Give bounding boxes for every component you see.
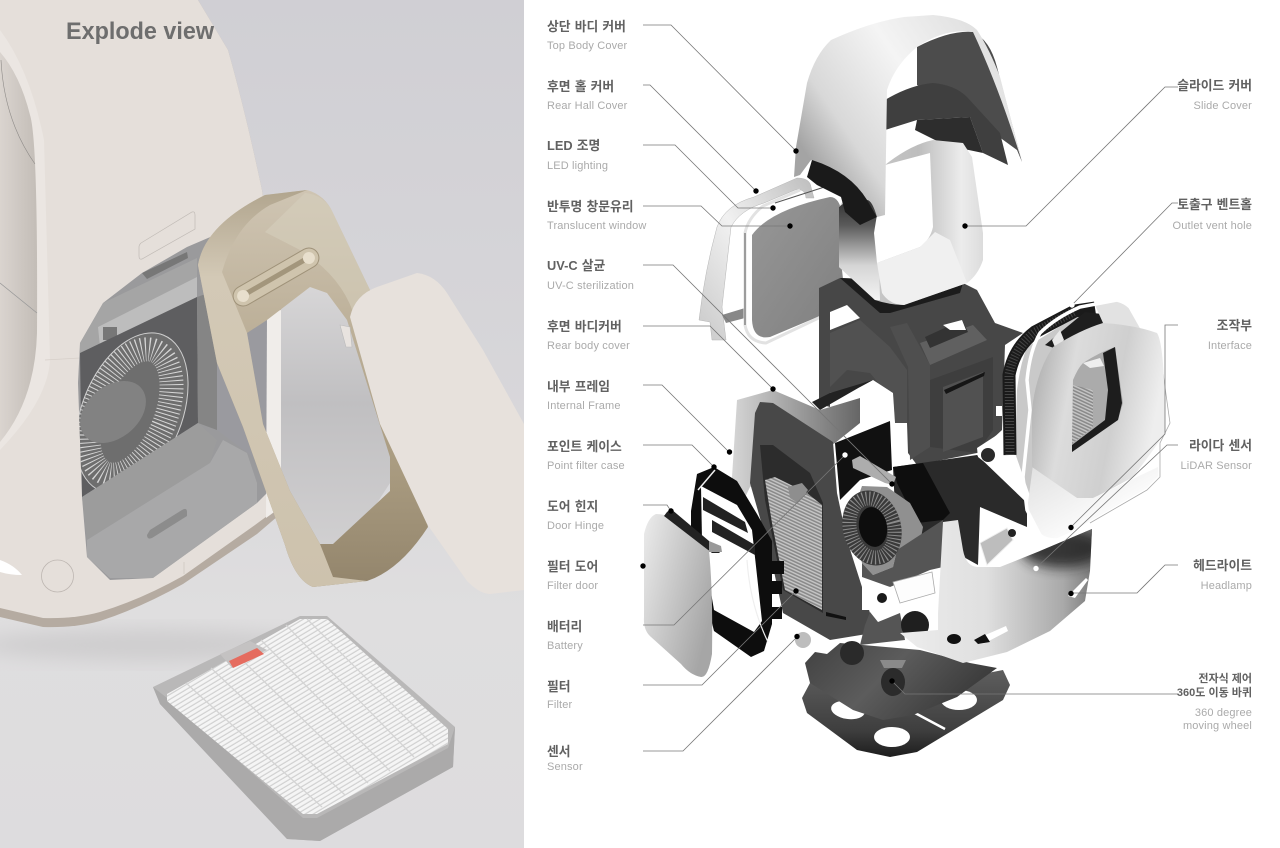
rear hall cover [699, 178, 814, 340]
label: headlamp: 헤드라이트 [1193, 558, 1252, 573]
fan [79, 332, 189, 488]
shell opening [1072, 347, 1123, 452]
main body [0, 0, 285, 627]
translucent window [752, 197, 846, 337]
label: rear body cover: Rear body cover [547, 340, 630, 352]
see-through background behind door [281, 308, 390, 544]
central frame [812, 278, 1023, 465]
dark mass behind the lower assembly [893, 455, 1027, 567]
label: slide cover: Slide Cover [1193, 100, 1252, 112]
label: filter door [547, 559, 598, 592]
label: interface [1208, 318, 1252, 352]
back panel [1015, 312, 1100, 510]
label: translucent window: Translucent window [547, 220, 647, 232]
filter mesh [765, 477, 822, 610]
wheels [840, 611, 929, 696]
label: door hinge [547, 499, 604, 532]
label: LED lighting: LED 조명 [547, 138, 600, 153]
label: filter: Filter [547, 699, 573, 711]
black fan plate [835, 421, 892, 500]
left labels [547, 19, 647, 773]
black mass behind fan [893, 463, 950, 523]
filter case [691, 467, 784, 657]
vent assembly [1009, 300, 1170, 540]
label: LED lighting [547, 138, 608, 172]
label: translucent window [547, 199, 647, 232]
label: moving wheel: 360 degree [1195, 707, 1252, 719]
label: headlamp: Headlamp [1201, 580, 1252, 592]
UV block and fan housing [850, 456, 943, 610]
label: interface: Interface [1208, 340, 1252, 352]
sensor disc [795, 632, 811, 648]
leader dots [640, 148, 1075, 684]
white cutout and knob [977, 435, 1023, 492]
mechanism inside ring [1045, 312, 1118, 350]
label: LiDAR sensor: 라이다 센서 [1189, 438, 1252, 453]
label: sensor [547, 744, 583, 773]
front lower body cover [900, 520, 1104, 663]
rear dark body [750, 402, 873, 640]
label: top body cover [547, 19, 628, 52]
rear body cover [732, 390, 860, 525]
label: point filter case: 포인트 케이스 [547, 439, 622, 454]
toothed black belt [1009, 308, 1095, 455]
label: LiDAR sensor: LiDAR Sensor [1180, 460, 1252, 472]
magnet slot [232, 248, 320, 306]
upper plate [805, 643, 997, 720]
label: moving wheel: 360도 이동 바퀴 [1177, 686, 1252, 699]
label: LED lighting: LED lighting [547, 160, 608, 172]
exploded diagram [640, 15, 1178, 757]
label: sensor: Sensor [547, 761, 583, 773]
label: internal frame [547, 379, 621, 412]
base plate [802, 670, 1010, 757]
battery [980, 528, 1013, 565]
door hinge [664, 509, 720, 553]
lower shell [1027, 465, 1160, 540]
label: outlet vent hole: Outlet vent hole [1173, 220, 1252, 232]
label: top body cover: 상단 바디 커버 [547, 19, 626, 34]
label: rear body cover: 후면 바디커버 [547, 319, 622, 334]
filter [153, 616, 455, 841]
label: door hinge: Door Hinge [547, 520, 604, 532]
label: translucent window: 반투명 창문유리 [547, 199, 634, 214]
label: filter [547, 679, 573, 711]
label: interface: 조작부 [1217, 318, 1252, 333]
right labels [1173, 78, 1252, 732]
label: point filter case [547, 439, 625, 472]
thin white ring [1023, 300, 1170, 540]
label: outlet vent hole: 토출구 벤트홀 [1177, 197, 1252, 212]
top body cover [794, 15, 1022, 217]
label: internal frame: Internal Frame [547, 400, 621, 412]
label: rear hall cover: Rear Hall Cover [547, 100, 628, 112]
label: filter: 필터 [547, 679, 571, 694]
label: rear hall cover [547, 79, 628, 112]
blower fan [834, 484, 910, 572]
door panel [350, 273, 524, 594]
label: slide cover [1177, 78, 1252, 112]
leader lines [643, 25, 1178, 751]
filter bay interior [78, 237, 267, 580]
label: point filter case: Point filter case [547, 460, 625, 472]
filter pull tab [220, 641, 267, 668]
slide cover [839, 140, 983, 305]
label: moving wheel: moving wheel [1183, 720, 1252, 732]
label: battery [547, 619, 583, 652]
label: door hinge: 도어 힌지 [547, 499, 598, 514]
label: moving wheel [1177, 671, 1252, 732]
label: UV-C sterilization [547, 258, 634, 292]
label: rear body cover [547, 319, 630, 352]
door frame [198, 190, 428, 587]
label: UV-C sterilization: UV-C 살균 [547, 258, 606, 273]
label: headlamp [1193, 558, 1252, 592]
main shell [1032, 323, 1165, 498]
panel: product photo [0, 0, 524, 848]
top right ring fill [1095, 300, 1163, 373]
label: slide cover: 슬라이드 커버 [1177, 78, 1252, 93]
label: internal frame: 내부 프레임 [547, 379, 610, 394]
label: moving wheel: 전자식 제어 [1198, 671, 1252, 685]
label: filter door: 필터 도어 [547, 559, 598, 574]
label: battery: Battery [547, 640, 583, 652]
label: top body cover: Top Body Cover [547, 40, 628, 52]
white body edge seen through door [266, 310, 281, 518]
label: outlet vent hole [1173, 197, 1252, 232]
label: rear hall cover: 후면 홀 커버 [547, 79, 614, 94]
top cover dark inner [885, 32, 1022, 165]
label: sensor: 센서 [547, 744, 571, 759]
title: Explode view [66, 18, 214, 45]
window rim [745, 190, 846, 343]
label: UV-C sterilization: UV-C sterilization [547, 280, 634, 292]
white air duct block [893, 572, 935, 603]
filter door [644, 509, 722, 677]
label: filter door: Filter door [547, 580, 598, 592]
dark cover lip [807, 160, 877, 225]
label: battery: 배터리 [547, 619, 582, 634]
label: LiDAR sensor [1180, 438, 1252, 472]
